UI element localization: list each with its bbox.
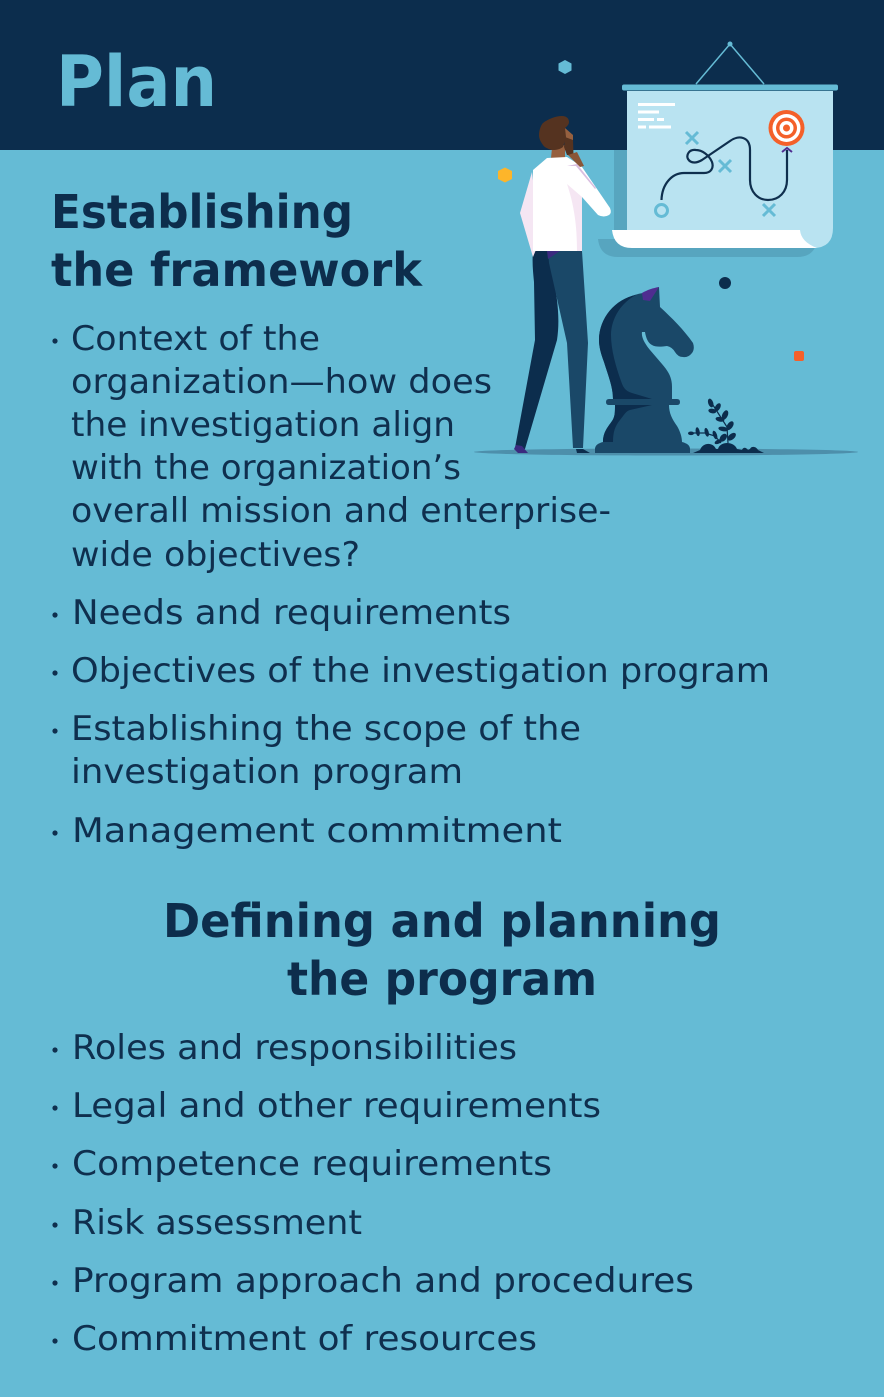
heading: defining and planning the program xyxy=(163,894,721,1006)
chess knight xyxy=(595,287,694,453)
board notes xyxy=(638,103,675,128)
item: scope: investigation program xyxy=(71,752,463,792)
item: context of the organization: overall mission and enterprise- xyxy=(71,491,611,531)
item: scope xyxy=(52,709,581,792)
item: context of the organization: organization—how does xyxy=(71,362,492,402)
item: legal: Legal and other requirements xyxy=(72,1086,601,1126)
plant and soil xyxy=(688,398,764,453)
play markers xyxy=(656,132,775,216)
heading: defining and planning the program: Defining and planning xyxy=(163,894,721,948)
heading: defining and planning the program: the program xyxy=(287,952,597,1006)
item: risk: Risk assessment xyxy=(72,1203,362,1243)
item: context of the organization: Context of the xyxy=(71,319,320,359)
ground shadow xyxy=(474,448,858,456)
heading: establishing the framework: Establishing xyxy=(51,185,353,239)
header band xyxy=(0,0,884,150)
heading: establishing the framework: the framework xyxy=(51,243,423,297)
list: framework items xyxy=(52,319,770,851)
item: context of the organization: with the organization’s xyxy=(71,448,461,488)
heading: establishing the framework xyxy=(51,185,423,297)
target xyxy=(768,110,804,146)
item: context of the organization: wide objectives? xyxy=(71,535,360,575)
item: roles: Roles and responsibilities xyxy=(72,1028,517,1068)
decorative dots xyxy=(498,60,804,361)
item: context of the organization: the investigation align xyxy=(71,405,455,445)
item: objectives: Objectives of the investigation program xyxy=(71,651,770,691)
strategy board xyxy=(598,42,838,257)
item: context of the organization xyxy=(52,319,611,575)
list: program items xyxy=(52,1028,694,1359)
item: scope: Establishing the scope of the xyxy=(71,709,581,749)
item: competence: Competence requirements xyxy=(72,1144,552,1184)
person xyxy=(514,116,611,453)
item: resources: Commitment of resources xyxy=(72,1319,537,1359)
illustration: person, chess knight and strategy board xyxy=(474,42,858,456)
title: Plan xyxy=(56,41,217,123)
item: management commitment: Management commitment xyxy=(72,811,562,851)
route line xyxy=(662,138,787,200)
item: program approach: Program approach and procedures xyxy=(72,1261,694,1301)
item: needs and requirements: Needs and requirements xyxy=(72,593,511,633)
